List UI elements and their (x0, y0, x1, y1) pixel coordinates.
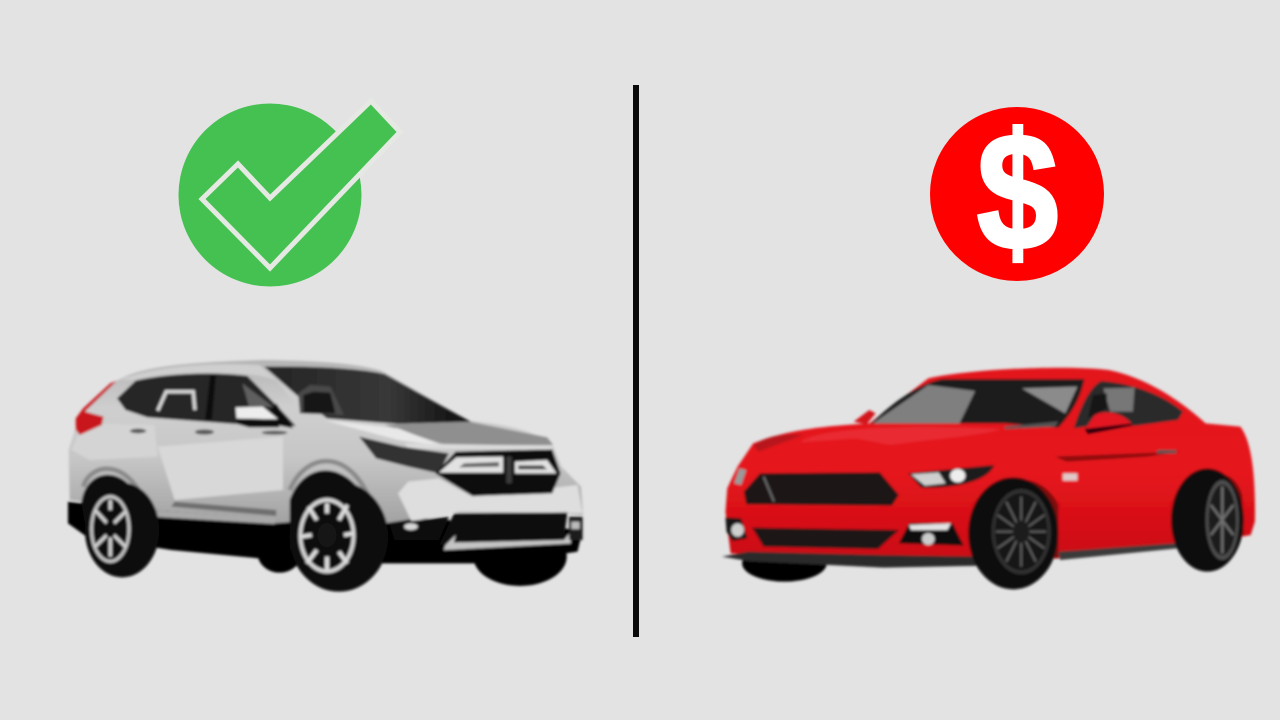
car fog lights (725, 517, 964, 546)
icon: red dollar coin: $ (977, 99, 1058, 285)
SUV lower bumper (390, 512, 583, 550)
icon: red dollar coin (930, 99, 1104, 285)
car windshield reflections (873, 385, 1077, 429)
SUV tail light (76, 381, 117, 435)
car front wheel (968, 477, 1058, 589)
car splitter (722, 552, 987, 568)
car headlight (908, 465, 994, 488)
SUV grille (435, 449, 561, 496)
SUV side windows (117, 374, 296, 426)
car rear wheel (1171, 468, 1244, 572)
SUV windshield (264, 367, 471, 424)
car far wheel front (742, 545, 827, 582)
car mirror right (1084, 412, 1133, 434)
car windshield (871, 379, 1084, 428)
SUV rear window reflections (158, 392, 195, 411)
icon: green check mark (178, 101, 400, 286)
car mirror left (854, 410, 876, 424)
SUV headlight (359, 437, 449, 473)
SUV front wheel (289, 482, 388, 592)
car grille detail (764, 477, 774, 502)
SUV wheel arches (83, 461, 374, 512)
car lower grille (752, 528, 899, 549)
SUV underbody (68, 502, 583, 563)
red sports car (722, 368, 1255, 589)
SUV body highlights (71, 420, 583, 522)
car body crease (1055, 452, 1181, 462)
SUV far wheels (258, 527, 567, 586)
divider line (633, 85, 639, 637)
car front grille (744, 472, 899, 506)
silver SUV (68, 360, 583, 592)
SUV side sill (141, 510, 276, 524)
car body (725, 368, 1255, 558)
SUV door handles (130, 429, 287, 435)
SUV roof rail (120, 364, 303, 413)
car side skirt (1058, 542, 1187, 560)
car left headlight (734, 468, 746, 485)
SUV body (69, 360, 583, 523)
car hood highlights (753, 427, 1001, 452)
SUV rear wheel (85, 483, 159, 577)
SUV chrome bars (439, 457, 557, 483)
car side window (1074, 381, 1183, 428)
SUV mirror (236, 403, 293, 428)
